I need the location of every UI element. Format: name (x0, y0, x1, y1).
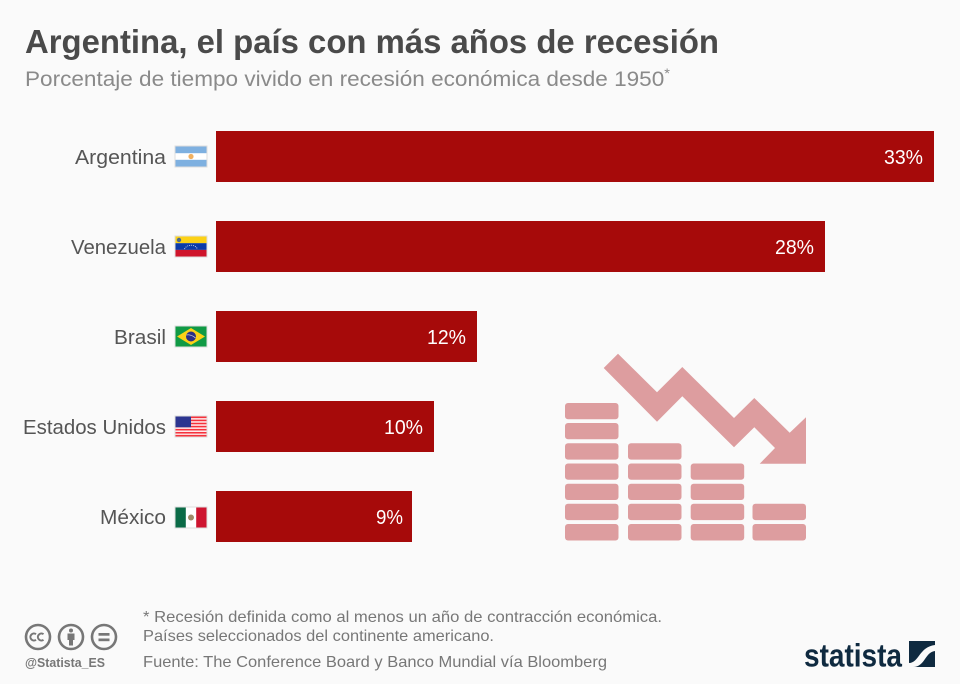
stack column 2 (628, 443, 682, 540)
icon: statista mark (909, 641, 935, 667)
row: México (100, 491, 412, 542)
icon: attribution (59, 625, 83, 649)
row: Brasil (114, 311, 477, 362)
row: Venezuela (71, 221, 825, 272)
footnote text (143, 609, 662, 645)
icon: no derivatives (92, 625, 116, 649)
icon: flag of Mexico (174, 506, 208, 528)
row: México: México (100, 506, 166, 529)
row: Argentina: 33% (884, 146, 923, 169)
icon: flag of Argentina (174, 146, 208, 168)
row: Argentina (75, 131, 934, 182)
downward arrow (604, 354, 806, 464)
row: Venezuela: 28% (775, 236, 814, 259)
bar chart (23, 131, 934, 542)
footnote text: * Recesión definida como al menos un año de contracción económica. (143, 609, 662, 626)
subtitle: Porcentaje de tiempo vivido en recesión económica desde 1950 (25, 67, 635, 91)
title: Argentina, el país con más años de recesión (25, 24, 719, 61)
logo: statista: statista (804, 638, 902, 674)
row: Estados Unidos: 10% (384, 416, 423, 439)
subtitle: * (664, 65, 671, 81)
row: Estados Unidos: Estados Unidos (23, 416, 166, 439)
icon: cc (26, 625, 50, 649)
footnote text: Países seleccionados del continente americano. (143, 628, 494, 645)
social handle: @Statista_ES (25, 656, 105, 670)
icon: flag of Venezuela (174, 236, 208, 258)
icon: creative commons licence (26, 625, 116, 649)
row: Brasil: Brasil (114, 326, 166, 349)
row: Brasil: 12% (427, 326, 466, 349)
row: México: 9% (376, 506, 403, 529)
row: Argentina: Argentina (75, 146, 167, 169)
stack column 3 (691, 464, 744, 540)
row: Estados Unidos (23, 401, 434, 452)
icon: flag of United States (174, 416, 208, 438)
stack column 4 (752, 504, 806, 540)
stack column 1 (565, 403, 618, 540)
row: Venezuela: Venezuela (71, 236, 167, 259)
icon: falling stacks with downward arrow (565, 354, 806, 540)
icon: flag of Brazil (174, 326, 208, 348)
source text: Fuente: The Conference Board y Banco Mundial vía Bloomberg (143, 654, 607, 671)
